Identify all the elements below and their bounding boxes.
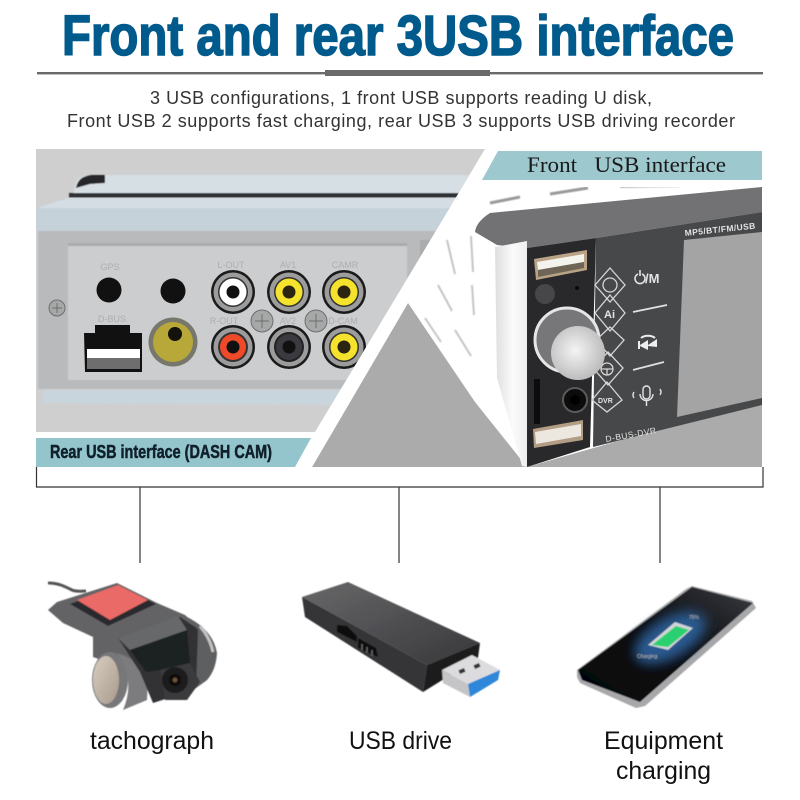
small port labels: D-BUS — [98, 314, 126, 324]
icon: previous — [638, 336, 657, 350]
icon: USB drive — [302, 582, 500, 697]
bracket details — [425, 186, 680, 356]
IR sensor and jack — [534, 284, 587, 424]
label: rear USB interface — [36, 438, 311, 467]
small port labels: L-OUT — [218, 260, 245, 270]
device top face — [475, 187, 762, 248]
icon: screws — [49, 300, 327, 332]
small port labels: R-OUT — [210, 316, 239, 326]
touch labels: Ai — [604, 309, 615, 321]
icon: composite socket — [148, 318, 198, 366]
touch labels: D-BUS-DVR — [605, 425, 657, 444]
button panel — [593, 212, 762, 447]
caption: equipment charging: charging — [616, 757, 711, 785]
white front strip — [495, 241, 527, 467]
icon: smartphone: 75% — [689, 615, 700, 621]
icon: round holes — [96, 278, 186, 304]
icon: smartphone — [577, 586, 756, 708]
small port labels: AV1 — [280, 260, 296, 270]
volume knob — [535, 308, 605, 380]
touch diamonds — [592, 268, 625, 412]
touch labels: /M — [645, 271, 659, 286]
label: rear USB interface: Rear USB interface (DASH CAM) — [50, 442, 272, 462]
floor — [312, 303, 762, 467]
panel dividers — [633, 305, 667, 370]
screen — [677, 232, 762, 417]
touch labels — [598, 221, 756, 444]
caption: USB drive: USB drive — [349, 727, 452, 755]
icon: smartphone: Charging — [637, 654, 658, 660]
small port labels: GPS — [100, 262, 120, 272]
bracket connector — [36, 467, 763, 563]
label: front USB interface: Front USB interface — [527, 152, 726, 177]
touch labels: MP5/BT/FM/USB — [684, 221, 756, 238]
icon: microphone — [633, 386, 661, 406]
subtitle text: Front USB 2 supports fast charging, rear USB 3 supports USB driving recorder — [67, 111, 735, 131]
dark port panel — [527, 238, 596, 467]
small port labels: AV2 — [280, 316, 296, 326]
caption: equipment charging — [604, 727, 723, 785]
subtitle text: 3 USB configurations, 1 front USB supports reading U disk, — [150, 88, 652, 108]
caption: equipment charging: Equipment — [604, 727, 723, 755]
icon: RCA sockets — [211, 270, 366, 369]
caption: tachograph: tachograph — [90, 727, 214, 755]
label: front USB interface — [482, 151, 762, 180]
icon: power — [635, 270, 645, 284]
small port labels: D-CAM — [328, 316, 358, 326]
small port labels — [98, 260, 359, 326]
panel: rear USB photo — [36, 149, 486, 432]
front USB ports — [533, 250, 587, 448]
subtitle text — [67, 88, 735, 131]
panel: front USB photo — [310, 186, 764, 467]
icon: dash cam — [48, 583, 217, 710]
small port labels: CAMR — [332, 260, 359, 270]
touch labels: DVR — [598, 398, 613, 405]
icon: rear USB port — [84, 325, 142, 372]
